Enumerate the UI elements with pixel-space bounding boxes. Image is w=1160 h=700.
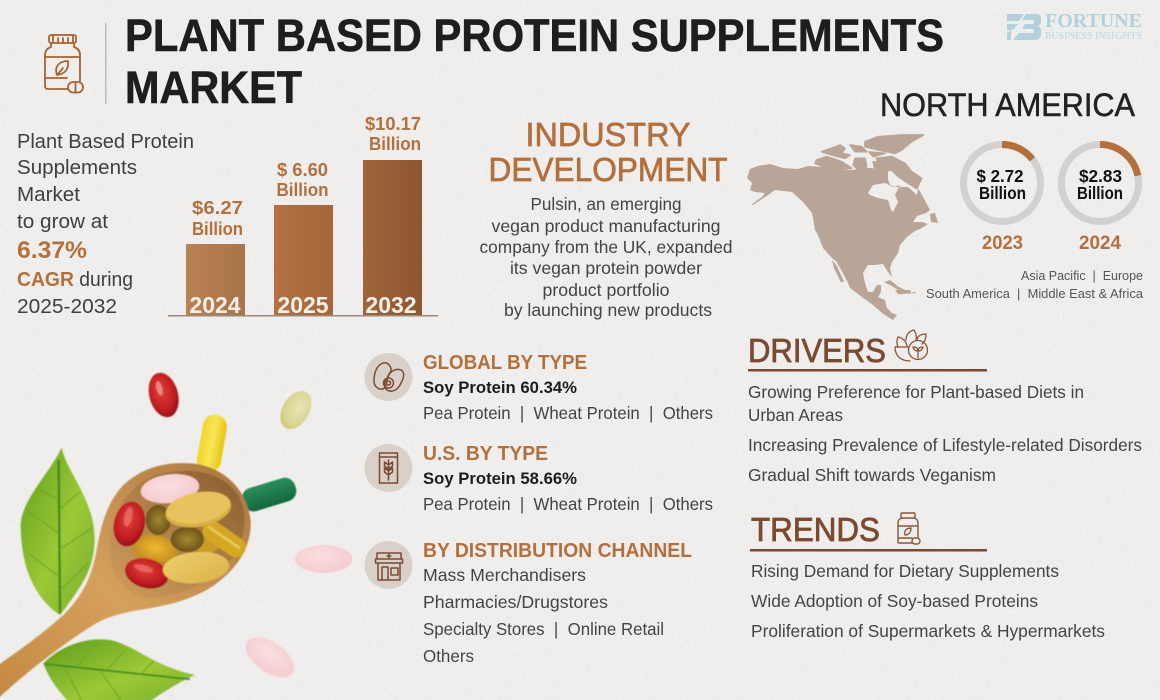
icon: wheat bag: [364, 444, 412, 492]
pills in spoon: [110, 471, 250, 593]
global by type text: Pea Protein | Wheat Protein | Others: [423, 403, 713, 423]
ring chart: 2024: [1062, 144, 1138, 254]
icon: soybean: [364, 353, 412, 401]
text: market growth summary: to grow at: [17, 211, 108, 233]
bar 2032: Billion: [369, 133, 421, 154]
drivers list: Growing Preference for Plant-based Diets in: [748, 382, 1084, 402]
panel: by distribution channel: [364, 540, 692, 666]
loose pink tablet right: [295, 545, 352, 573]
title: PLANT BASED PROTEIN SUPPLEMENTS: [125, 10, 944, 61]
text: other regions: Asia Pacific | Europe: [1021, 268, 1143, 283]
icon: bottle: [898, 513, 920, 544]
arctic islands: [815, 135, 923, 188]
ring chart: 2024: 2024: [1079, 232, 1121, 254]
bar 2024: $6.27: [192, 197, 243, 218]
panel: global by type: [364, 352, 713, 423]
bar 2025: 2025: [277, 292, 329, 318]
bottom leaf: [43, 639, 195, 700]
ring chart: 2023: Billion: [979, 183, 1026, 203]
left leaf: [21, 447, 95, 615]
industry development body: company from the UK, expanded: [480, 237, 732, 257]
panel: drivers: [748, 330, 1142, 485]
map: north america: [747, 135, 938, 320]
bar 2025: [274, 159, 333, 318]
drivers list: [748, 382, 1142, 485]
header divider: [105, 23, 106, 104]
wooden spoon: [0, 463, 251, 698]
text: other regions: [926, 268, 1144, 301]
baja and caribbean: [832, 260, 917, 294]
u.s. by type text: U.S. BY TYPE: [423, 443, 548, 465]
title: MARKET: [125, 62, 302, 113]
trends heading: TRENDS: [751, 511, 880, 548]
ring chart: 2024: Billion: [1077, 183, 1123, 203]
yellow capsule: [195, 413, 229, 474]
drivers list: Gradual Shift towards Veganism: [748, 465, 996, 485]
loose pink tablet bottom: [239, 629, 301, 685]
bar 2032: [363, 113, 422, 318]
text: market growth summary: CAGR during: [17, 269, 133, 291]
ring chart: 2023: 2023: [982, 232, 1023, 254]
u.s. by type text: [423, 443, 713, 514]
trends list: Rising Demand for Dietary Supplements: [751, 561, 1059, 581]
distribution channel text: BY DISTRIBUTION CHANNEL: [423, 540, 692, 562]
bar 2024: 2024: [189, 292, 241, 318]
illustration: spoon with supplements and leaves: [0, 369, 352, 700]
green capsule: [239, 475, 299, 514]
logo: Fortune Business Insights: BUSINESS INSIGHTS: [1045, 31, 1142, 42]
trends list: [751, 561, 1105, 641]
ring chart: 2023: [964, 144, 1040, 254]
bar 2024: [186, 197, 245, 318]
logo: Fortune Business Insights: [1007, 10, 1142, 42]
title: [125, 10, 944, 113]
text: market growth summary: Plant Based Protein: [17, 131, 194, 153]
icon: plant bowl: [895, 330, 928, 361]
ring chart: 2024: $2.83: [1079, 166, 1122, 186]
distribution channel text: Mass Merchandisers: [423, 565, 586, 585]
global by type text: GLOBAL BY TYPE: [423, 352, 587, 374]
text: market growth summary: 6.37%: [17, 237, 87, 264]
icon: pharmacy: [364, 541, 412, 589]
distribution channel text: Specialty Stores | Online Retail: [423, 619, 664, 639]
logo: Fortune Business Insights: FORTUNE: [1045, 10, 1142, 32]
text: market growth summary: 2025-2032: [17, 296, 117, 318]
ring chart: 2023: $ 2.72: [976, 166, 1024, 186]
text: market growth summary: Supplements: [17, 157, 137, 179]
distribution channel text: Others: [423, 646, 474, 666]
bar chart: market size: [168, 113, 438, 318]
industry development body: product portfolio: [542, 280, 670, 300]
panel: u.s. by type: [364, 443, 713, 514]
bar 2025: $ 6.60: [277, 159, 328, 180]
global by type text: [423, 352, 713, 423]
panel: industry development: [480, 116, 732, 320]
industry development heading: [488, 116, 728, 188]
industry development body: its vegan protein powder: [510, 258, 702, 278]
bar 2032: 2032: [365, 292, 417, 318]
distribution channel text: [423, 540, 692, 666]
industry development body: vegan product manufacturing: [492, 216, 720, 236]
panel: trends: [750, 511, 1105, 641]
industry development body: Pulsin, an emerging: [530, 194, 682, 214]
icon: supplement bottle: [45, 35, 83, 92]
spoon bowl: [110, 471, 244, 598]
global by type text: Soy Protein 60.34%: [423, 378, 577, 397]
loose red softgel: [144, 369, 183, 421]
industry development body: by launching new products: [504, 300, 712, 320]
u.s. by type text: Soy Protein 58.66%: [423, 469, 577, 488]
trends list: Wide Adoption of Soy-based Proteins: [751, 591, 1038, 611]
bar 2032: $10.17: [365, 113, 421, 134]
drivers heading: DRIVERS: [748, 332, 886, 369]
text: market growth summary: Market: [17, 184, 80, 206]
bar 2025: Billion: [276, 179, 328, 200]
drivers list: Increasing Prevalence of Lifestyle-related Disorders: [748, 435, 1142, 455]
industry development heading: DEVELOPMENT: [488, 151, 728, 188]
loose clear softgel: [274, 385, 318, 435]
heading: north america: NORTH AMERICA: [880, 87, 1136, 123]
trends list: Proliferation of Supermarkets & Hypermarkets: [751, 621, 1105, 641]
bar 2024: Billion: [192, 218, 243, 239]
text: market growth summary: [17, 131, 194, 318]
industry development heading: INDUSTRY: [526, 116, 690, 153]
drivers list: Urban Areas: [748, 405, 843, 425]
text: other regions: South America | Middle East & Africa: [926, 286, 1144, 301]
industry development body: [480, 194, 732, 320]
distribution channel text: Pharmacies/Drugstores: [423, 592, 608, 612]
u.s. by type text: Pea Protein | Wheat Protein | Others: [423, 494, 713, 514]
